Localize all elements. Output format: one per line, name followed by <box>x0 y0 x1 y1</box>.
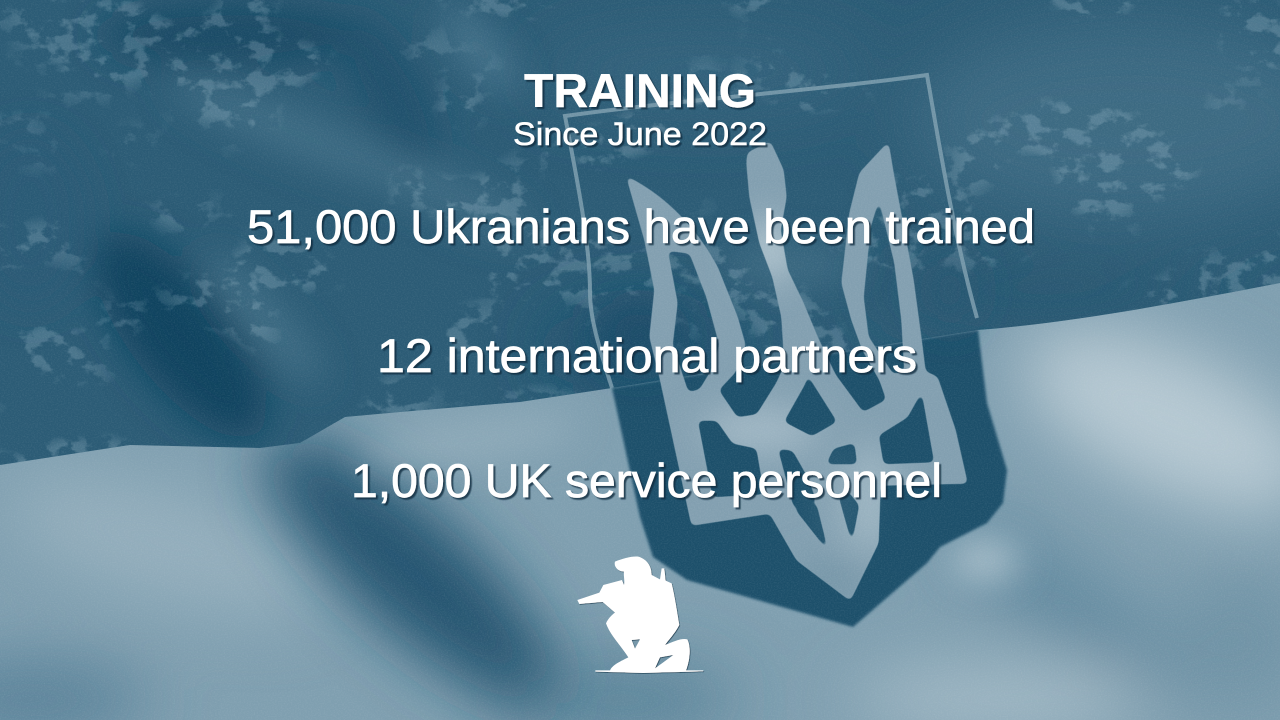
Ukrainian coat of arms <box>565 75 1007 627</box>
statistic: international partners: 12 international partners <box>377 329 917 382</box>
subheading: since June 2022: Since June 2022 <box>513 116 767 152</box>
heading: training: TRAINING <box>524 64 756 117</box>
title block <box>513 64 767 152</box>
shield: dark lower body <box>612 330 1007 627</box>
trident <box>628 142 967 599</box>
flag: lower field <box>0 283 1280 720</box>
icon: kneeling soldier <box>577 557 703 673</box>
shield: soft highlight <box>810 440 870 560</box>
icon: ground line <box>595 670 703 673</box>
flag: upper field <box>0 0 1280 462</box>
shield: outline <box>565 75 977 388</box>
scratched texture <box>0 0 1280 470</box>
shield: dark patches on upper panel <box>600 250 980 370</box>
statistic: UK service personnel: 1,000 UK service personnel <box>351 454 942 507</box>
statistic: Ukranians trained: 51,000 Ukranians have been trained <box>247 200 1035 253</box>
statistics <box>247 200 1035 507</box>
